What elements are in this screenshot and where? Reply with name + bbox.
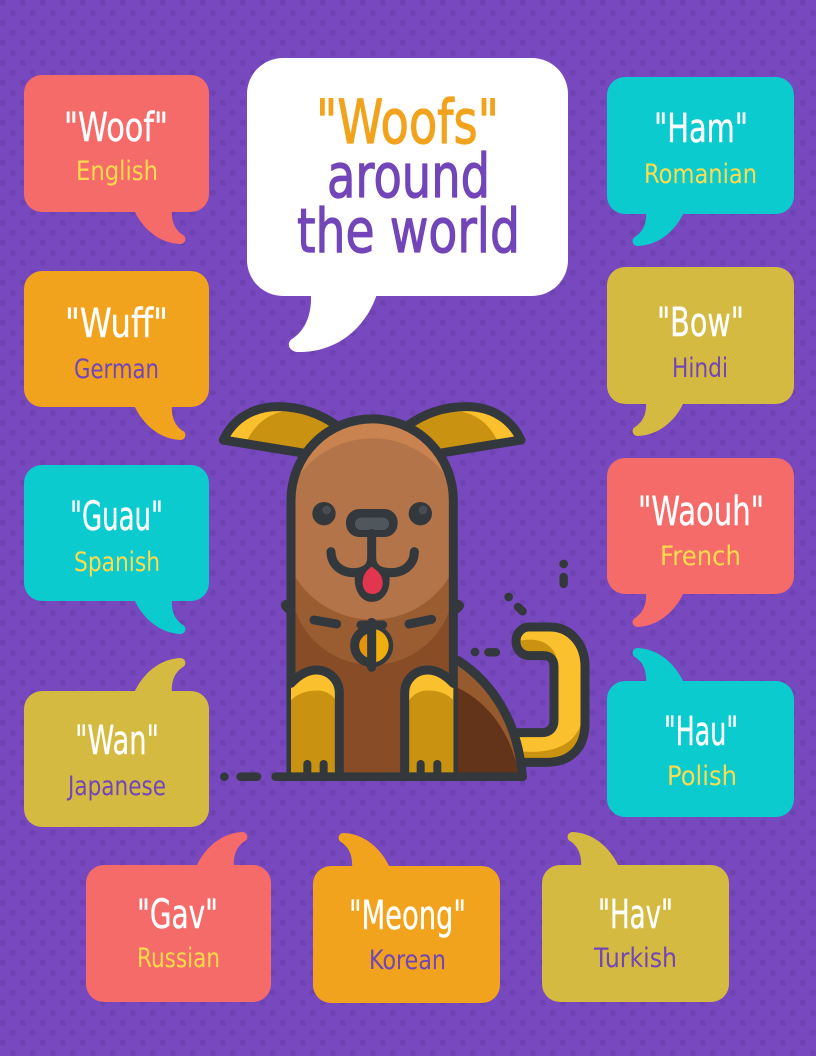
bubble: Wan Japanese	[24, 658, 209, 827]
icon: tongue	[359, 567, 385, 597]
bubble: Hav Turkish: "Hav"	[598, 892, 673, 938]
bubble: Guau Spanish: "Guau"	[70, 494, 163, 540]
bubble: Hau Polish	[607, 648, 794, 817]
bubble: Wuff German	[24, 271, 209, 440]
icon: dog eyes	[312, 502, 432, 525]
icon: dog nose	[346, 509, 398, 558]
bubble: Wuff German: German	[74, 354, 159, 385]
bubble: Hav Turkish	[542, 832, 729, 1002]
icon: collar	[314, 619, 432, 667]
icon: neck tufts	[281, 599, 464, 615]
icon: dog tail	[516, 627, 585, 762]
icon: dog front legs	[291, 670, 453, 777]
icon: dog haunch	[455, 660, 522, 777]
icon: dog ears	[223, 407, 521, 460]
bubble: Hau Polish: "Hau"	[664, 709, 738, 755]
title: around: around	[327, 141, 490, 212]
bubble: Gav Russian: "Gav"	[137, 892, 218, 938]
bubble: Meong Korean: Korean	[369, 945, 446, 976]
bubble: Gav Russian	[86, 832, 271, 1002]
bubble: Hau Polish: Polish	[667, 761, 737, 792]
bubble: Bow Hindi: Hindi	[672, 353, 728, 384]
bubble: Meong Korean: "Meong"	[349, 893, 466, 939]
icon: dog mouth	[331, 552, 414, 573]
title: Woofs: "Woofs"	[316, 87, 499, 158]
bubble: Gav Russian: Russian	[137, 943, 220, 974]
icon: dog body and head	[282, 410, 463, 780]
ground line	[220, 772, 523, 781]
bubble: Waouh French: "Waouh"	[638, 489, 764, 535]
bubble: Meong Korean	[313, 833, 500, 1003]
bubble: Wan Japanese: "Wan"	[75, 718, 159, 764]
bubble: Ham Romanian	[607, 77, 794, 246]
bubble: Wan Japanese: Japanese	[66, 771, 166, 802]
bubble: Guau Spanish: Spanish	[74, 547, 160, 578]
illustration: sitting dog	[220, 407, 585, 781]
bubble: Ham Romanian: "Ham"	[654, 106, 748, 152]
bubble: Ham Romanian: Romanian	[644, 159, 757, 190]
bubble: Hav Turkish: Turkish	[593, 943, 677, 974]
title: the world: the world	[297, 196, 520, 267]
motion marks	[471, 560, 568, 656]
bubble: Waouh French: French	[660, 541, 741, 572]
bubble: Woof English: "Woof"	[64, 105, 168, 151]
bubble: Wuff German: "Wuff"	[65, 301, 168, 347]
bubble: Woof English: English	[76, 156, 158, 187]
bubble: Guau Spanish	[24, 465, 209, 634]
bubble: Waouh French	[607, 458, 794, 627]
title speech bubble	[247, 58, 568, 352]
bubble: Woof English	[24, 75, 209, 244]
bubble: Bow Hindi	[607, 267, 794, 436]
bubble: Bow Hindi: "Bow"	[657, 300, 744, 346]
